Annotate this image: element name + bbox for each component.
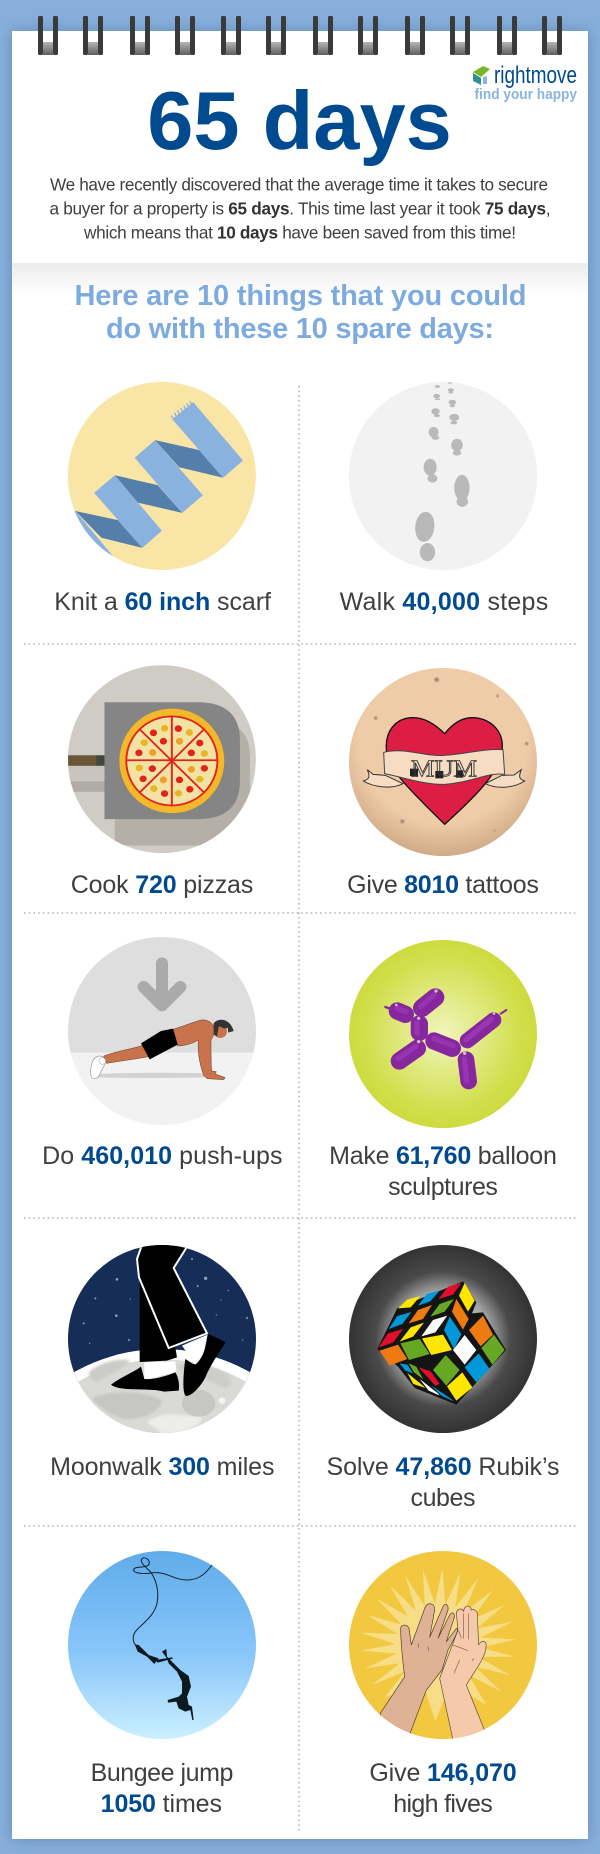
subheading: Here are 10 things that you could (74, 280, 526, 312)
intro paragraph: a buyer for a property is 65 days. This time last year it took 75 days, (50, 199, 550, 219)
intro paragraph: which means that 10 days have been saved from this time! (83, 223, 516, 243)
caption: balloon sculptures: Make 61,760 balloon (329, 1142, 557, 1170)
caption: Rubik's cubes: Solve 47,860 Rubik’s (326, 1453, 560, 1481)
caption: bungee: 1050 times (101, 1790, 222, 1818)
intro paragraph (50, 175, 550, 243)
intro paragraph: We have recently discovered that the average time it takes to secure (50, 175, 548, 195)
subheading (74, 280, 526, 345)
caption: high fives (369, 1759, 517, 1818)
header card shadow (12, 263, 588, 295)
icon: push-up (67, 936, 257, 1126)
icon: Rubik's cube (349, 1245, 537, 1433)
caption: Rubik's cubes: cubes (410, 1484, 476, 1512)
icon: high five (348, 1550, 538, 1740)
caption: high fives: Give 146,070 (369, 1759, 517, 1787)
icon: moonwalk (68, 1245, 256, 1433)
icon: heart tattoo: MUM (411, 756, 477, 782)
icon: bungee jumper (68, 1551, 256, 1739)
caption: bungee: Bungee jump (91, 1759, 233, 1787)
caption: pizzas: Cook 720 pizzas (71, 871, 253, 899)
icon: balloon dog (349, 940, 537, 1128)
logo: rightmove: rightmove (494, 62, 577, 89)
caption: bungee (91, 1759, 233, 1818)
logo: rightmove (473, 62, 577, 103)
caption: scarf: Knit a 60 inch scarf (54, 588, 271, 616)
logo: rightmove: find your happy (474, 87, 577, 103)
caption: push-ups: Do 460,010 push-ups (42, 1142, 282, 1170)
dividers (24, 386, 576, 1832)
caption: Rubik's cubes (326, 1453, 560, 1512)
icon: pizza on a peel (68, 665, 256, 853)
caption: balloon sculptures (329, 1142, 557, 1201)
caption: moonwalk: Moonwalk 300 miles (50, 1453, 274, 1481)
caption: balloon sculptures: sculptures (388, 1173, 498, 1201)
caption: steps: Walk 40,000 steps (340, 588, 548, 616)
subheading: do with these 10 spare days: (106, 313, 494, 345)
icon: heart tattoo (349, 668, 537, 856)
caption: tattoos: Give 8010 tattoos (347, 871, 539, 899)
icon: scarf (65, 382, 256, 570)
icon: footprints (349, 382, 537, 570)
caption: high fives: high fives (393, 1790, 493, 1818)
notebook spiral rings (38, 16, 562, 55)
title: 65 days (147, 74, 452, 167)
